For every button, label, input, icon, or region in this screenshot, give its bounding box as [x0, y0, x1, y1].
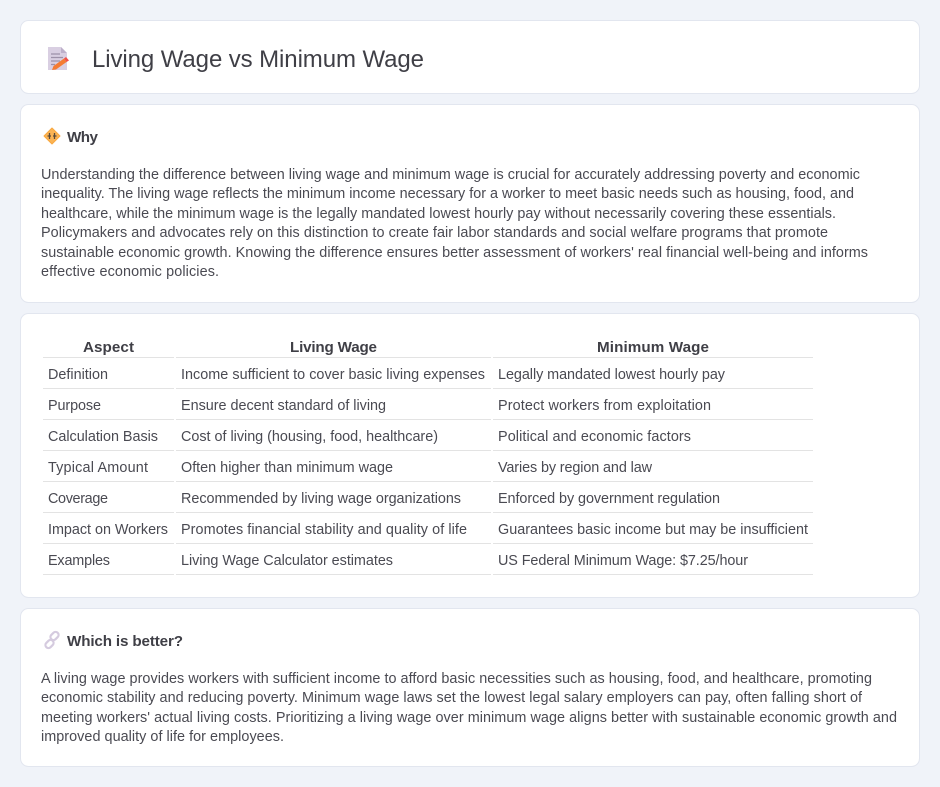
- table row: definition: [43, 367, 813, 389]
- table row: definition: Definition: [48, 367, 108, 383]
- table row: coverage: [43, 491, 813, 513]
- table row: impact on workers: Guarantees basic income but may be insufficient: [498, 522, 808, 538]
- text block: which is better paragraph: A living wage provides workers with sufficient income to afford basic necessities such as housing, food, and healthcare, promoting: [41, 671, 872, 687]
- table header row: Aspect: [83, 339, 134, 356]
- text block: why paragraph: effective economic policies.: [41, 264, 219, 280]
- table row: typical amount: Typical Amount: [48, 460, 148, 476]
- table row: examples: US Federal Minimum Wage: $7.25/hour: [498, 553, 748, 569]
- text block: why paragraph: inequality. The living wage reflects the minimum income necessary for a worker to meet basic needs such as housing, food, and: [41, 186, 854, 202]
- text block: which is better paragraph: meeting workers' actual living costs. Prioritizing a living wage over minimum wage aligns better with sustainable economic growth and: [41, 710, 897, 726]
- text block: why paragraph: Policymakers and advocates rely on this distinction to create fair labor standards and social welfare programs that promote: [41, 225, 828, 241]
- table row: calculation basis: Cost of living (housing, food, healthcare): [181, 429, 438, 445]
- table row: examples: Examples: [48, 553, 110, 569]
- text block: why paragraph: sustainable economic growth. Knowing the difference ensures better assessment of workers' real financial well-being and informs: [41, 245, 868, 261]
- table row: impact on workers: Impact on Workers: [48, 522, 168, 538]
- table row: purpose: [43, 398, 813, 420]
- heading: which is better: Which is better?: [67, 633, 183, 650]
- table row: typical amount: Often higher than minimum wage: [181, 460, 393, 476]
- panel: title header: [20, 20, 920, 94]
- text block: which is better paragraph: [41, 671, 897, 745]
- table row: impact on workers: Promotes financial stability and quality of life: [181, 522, 467, 538]
- table row: typical amount: [43, 460, 813, 482]
- table row: purpose: Ensure decent standard of living: [181, 398, 386, 414]
- table row: calculation basis: Political and economic factors: [498, 429, 691, 445]
- table row: examples: [43, 553, 813, 575]
- table row: definition: Legally mandated lowest hourly pay: [498, 367, 726, 383]
- title: Living Wage vs Minimum Wage: [92, 46, 424, 73]
- text block: why paragraph: [41, 167, 868, 280]
- table header row: Living Wage: [290, 339, 377, 356]
- table row: calculation basis: Calculation Basis: [48, 429, 158, 445]
- table row: examples: Living Wage Calculator estimates: [181, 553, 393, 569]
- table row: typical amount: Varies by region and law: [498, 460, 653, 476]
- table row: coverage: Coverage: [48, 491, 108, 507]
- text block: which is better paragraph: economic stability and reducing poverty. Minimum wage laws set the lowest legal salary employers can pay, often falling short of: [41, 690, 863, 706]
- table row: purpose: Purpose: [48, 398, 101, 414]
- table header row: [43, 339, 813, 358]
- panel: why: [20, 104, 920, 302]
- text block: why paragraph: healthcare, while the minimum wage is the legally mandated lowest hourly pay without necessarily covering these essentials.: [41, 206, 836, 222]
- text block: why paragraph: Understanding the difference between living wage and minimum wage is crucial for accurately addressing poverty and economic: [41, 167, 860, 183]
- heading: why: Why: [67, 129, 99, 146]
- panel: which is better: [20, 608, 920, 766]
- table row: purpose: Protect workers from exploitation: [498, 398, 711, 414]
- icon: warning diamond: [44, 128, 60, 144]
- icon: document with pencil: [48, 47, 69, 70]
- icon: chain link: [44, 631, 60, 649]
- table row: definition: Income sufficient to cover basic living expenses: [181, 367, 485, 383]
- table row: coverage: Recommended by living wage organizations: [181, 491, 461, 507]
- text block: which is better paragraph: improved quality of life for employees.: [41, 729, 284, 745]
- table row: coverage: Enforced by government regulation: [498, 491, 720, 507]
- table row: impact on workers: [43, 522, 813, 544]
- table header row: Minimum Wage: [597, 339, 709, 356]
- panel: comparison table: [20, 314, 920, 598]
- table row: calculation basis: [43, 429, 813, 451]
